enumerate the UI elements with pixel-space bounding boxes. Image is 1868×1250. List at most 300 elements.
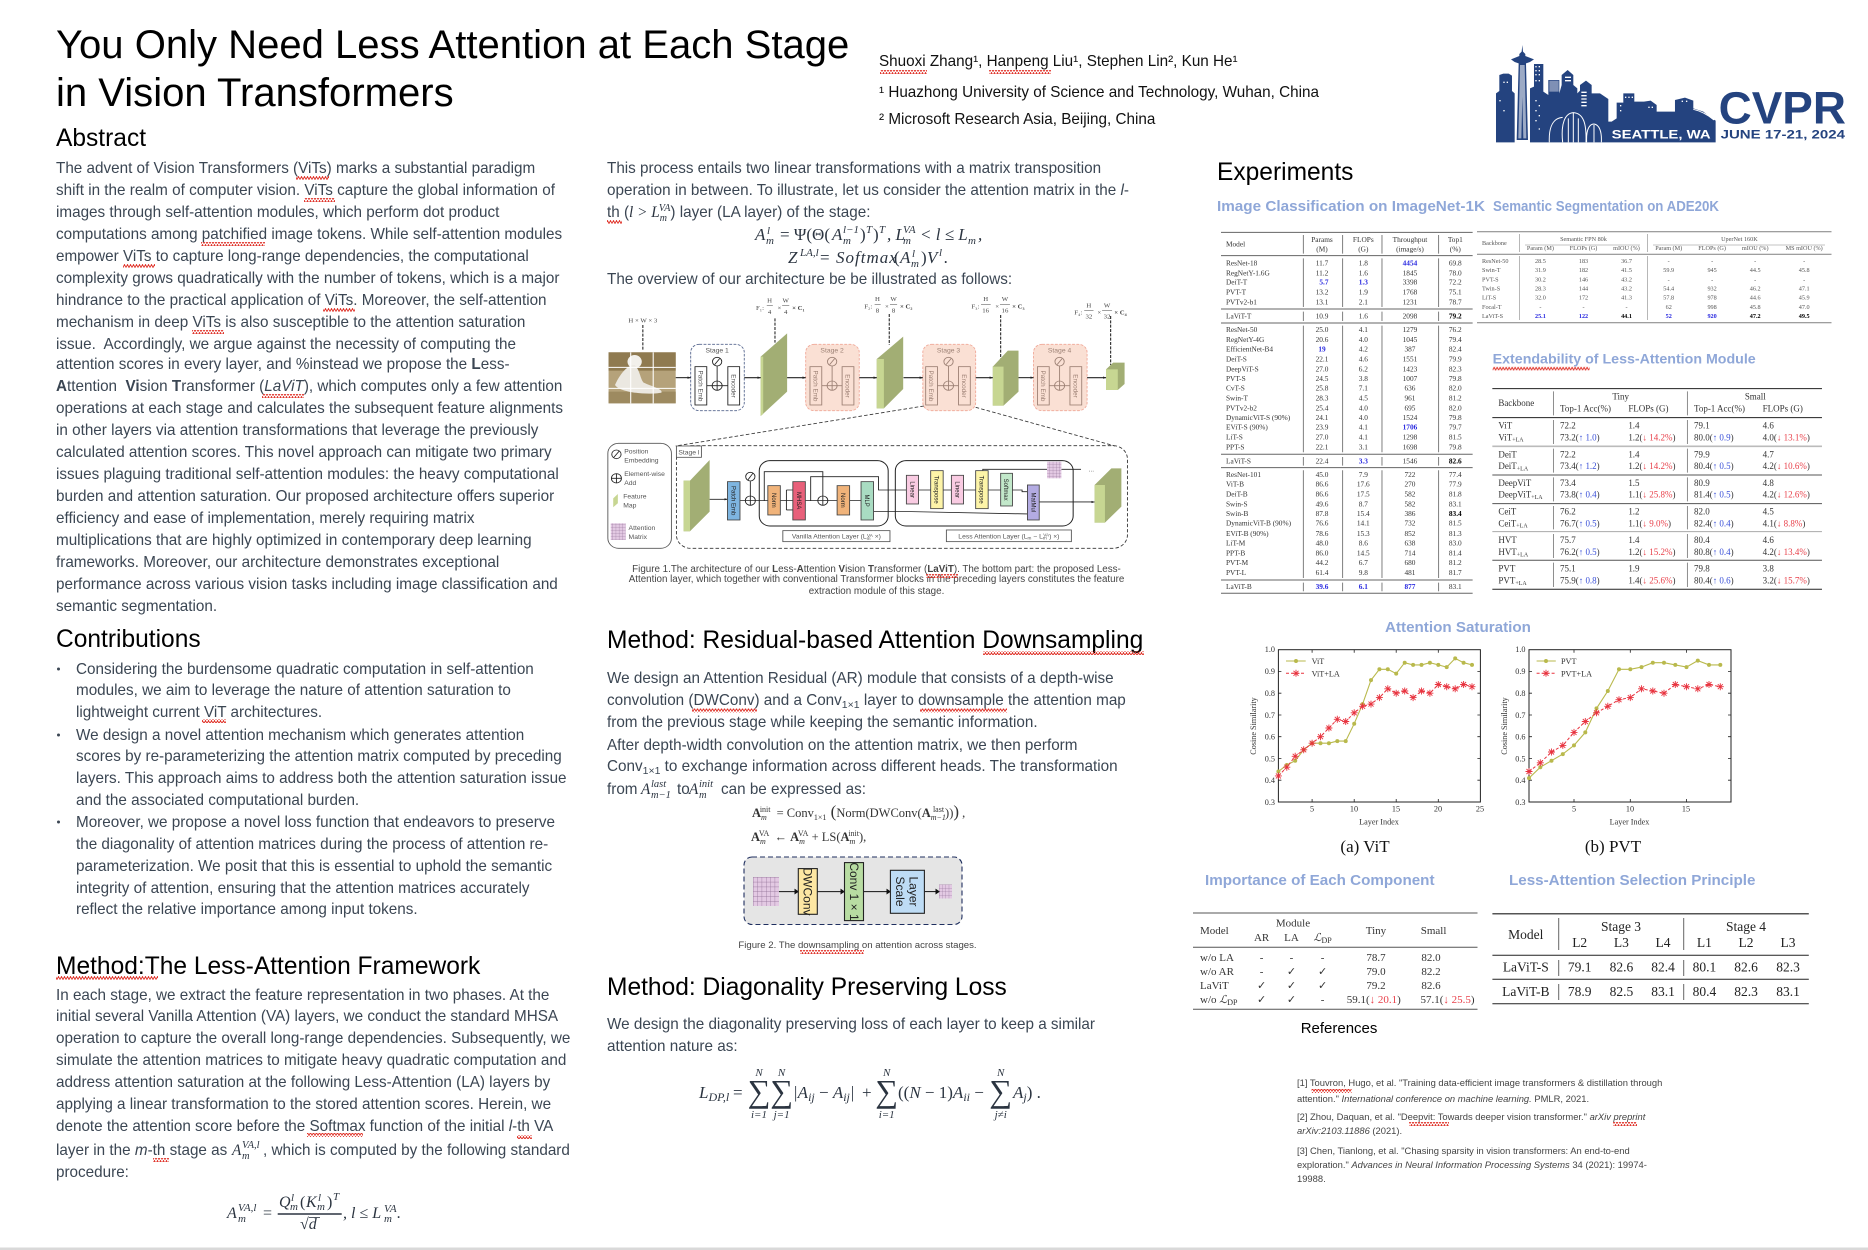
section: contributions: Contributions — [56, 626, 201, 653]
section: method, residual-based attention downsampling: from the previous stage while keeping the semantic information. — [607, 714, 1038, 731]
section: method, the less-attention framework: initial several Vanilla Attention (VA) layers, we conduct the standard MHSA — [56, 1008, 559, 1025]
table: ade20k segmentation: - — [1754, 276, 1756, 283]
vanilla attention and less attention layers: Linear — [953, 481, 960, 498]
table: ade20k segmentation: 998 — [1707, 304, 1717, 311]
formula: diagonality preserving loss: N — [777, 1067, 786, 1079]
table: ade20k segmentation: LaViT-S — [1482, 313, 1504, 320]
formula: attention residual: 1×1 — [814, 813, 826, 822]
table: ade20k segmentation: 41.5 — [1621, 267, 1632, 274]
table: extendability: 80.9 — [1694, 478, 1710, 488]
table: imagenet classification: ResNet-50 — [1226, 325, 1258, 334]
top labels: H — [983, 296, 988, 303]
top labels: W — [782, 298, 790, 305]
chart captions: (a) ViT — [1340, 837, 1390, 856]
table: ade20k segmentation: 57.8 — [1663, 295, 1674, 302]
formula: attention residual: init — [848, 829, 860, 838]
table: imagenet classification: 61.4 — [1316, 568, 1329, 577]
formula: attention residual: A — [840, 830, 850, 844]
section: abstract: calculated attention scores. This novel approach can mitigate two primary — [56, 444, 552, 461]
table: imagenet classification: 77.9 — [1449, 480, 1462, 489]
table: ade20k segmentation: - — [1539, 304, 1541, 311]
table: ade20k segmentation: 54.4 — [1663, 286, 1674, 293]
table: imagenet classification: 79.4 — [1449, 335, 1462, 344]
section: abstract: empower ViTs to capture long-range dependencies, the computational — [56, 248, 529, 265]
table: imagenet classification: 8.7 — [1359, 499, 1368, 508]
formula: la attention: m — [911, 258, 919, 270]
table: extendability: DeepViT — [1498, 478, 1532, 488]
axis labels and legend: 0.6 — [1265, 732, 1275, 742]
formula: diagonality preserving loss: − — [815, 1083, 833, 1102]
top labels: H × W × 3 — [628, 318, 658, 324]
section: method, the less-attention framework: , which is computed by the following standard — [263, 1142, 570, 1159]
legend: Element-wise — [624, 471, 665, 478]
table: imagenet classification: 5.7 — [1319, 278, 1329, 287]
section: abstract: multiplications that are highly optimized in contemporary deep learning — [56, 532, 532, 549]
section: method, diagonality preserving loss: We design the diagonality preserving loss of each layer to keep a similar — [607, 1016, 1095, 1033]
section: method, the less-attention framework: A — [231, 1142, 242, 1159]
table: ade20k segmentation: 28.3 — [1535, 286, 1546, 293]
figure 1 caption — [629, 564, 1125, 597]
formula: la attention: ( — [894, 248, 900, 267]
table: ade20k segmentation: MS mIOU (%) — [1786, 245, 1823, 252]
table: extendability: 1.4 — [1628, 421, 1640, 431]
table: imagenet classification: 4.0 — [1359, 335, 1368, 344]
table: imagenet classification: 81.8 — [1449, 490, 1462, 499]
legend — [608, 443, 671, 548]
table: extendability: 1.5 — [1628, 478, 1640, 488]
section: method, residual-based attention downsampling: to exchange information across different heads. The transformation — [660, 758, 1118, 775]
top labels: H — [1086, 303, 1092, 309]
table: ade20k segmentation: 30.2 — [1535, 276, 1546, 283]
table: extendability: 79.8 — [1694, 564, 1710, 574]
section: abstract: mechanism in deep ViTs is also susceptible to the attention saturation — [56, 314, 525, 331]
table: imagenet classification: 4.5 — [1359, 393, 1368, 402]
table: imagenet classification: 79.7 — [1449, 423, 1462, 432]
figure 2: downsampling diagram — [744, 857, 962, 924]
table: imagenet classification: 19 — [1318, 345, 1326, 354]
table: imagenet classification: 7.9 — [1359, 470, 1368, 479]
formula: attention matrix: A — [226, 1205, 237, 1222]
axis labels and legend: 0.7 — [1265, 711, 1275, 720]
table: imagenet classification: 1.6 — [1359, 311, 1368, 320]
table: ade20k segmentation: 47.0 — [1799, 304, 1810, 311]
top labels: W — [1002, 296, 1009, 303]
table: extendability: PVT — [1498, 564, 1516, 574]
axis labels and legend — [1500, 645, 1690, 826]
table: extendability: Backbone — [1498, 398, 1534, 408]
table: imagenet classification: 15.4 — [1357, 509, 1370, 518]
table: ade20k segmentation: - — [1711, 258, 1713, 265]
table: ade20k segmentation: Param (M) — [1527, 245, 1554, 252]
table: imagenet classification: 17.6 — [1357, 480, 1370, 489]
table: imagenet classification: 961 — [1404, 393, 1416, 402]
table: extendability: 80.8(↑ 0.4) — [1694, 547, 1734, 557]
table: imagenet classification: 1551 — [1403, 354, 1418, 363]
formula: attention residual: = Conv — [773, 806, 815, 820]
table: extendability: 80.4 — [1694, 535, 1710, 545]
table: extendability: CeiT — [1498, 518, 1517, 528]
table: imagenet classification: EfficientNet-B4 — [1226, 345, 1273, 354]
table: imagenet classification: 39.6 — [1316, 582, 1329, 591]
formula: la attention: , L — [887, 225, 905, 244]
section: abstract: The advent of Vision Transformers (ViTs) marks a substantial paradigm — [56, 160, 535, 177]
figure 2 caption: Figure 2. The downsampling on attention across stages. — [738, 940, 977, 951]
table: imagenet classification: 4.2 — [1359, 345, 1368, 354]
table: less-attention selection principle: 83.1 — [1651, 984, 1675, 999]
table: imagenet classification: ResNet-18 — [1226, 259, 1258, 268]
section: contributions: Considering the burdensome quadratic computation in self-attention — [76, 661, 534, 678]
table: extendability: DeiT — [1498, 449, 1517, 459]
table: imagenet classification: 3.1 — [1359, 442, 1368, 451]
authors and affiliations — [879, 53, 1319, 128]
table: imagenet classification: 387 — [1404, 345, 1416, 354]
table: imagenet classification: 1698 — [1403, 442, 1418, 451]
section heading: experiments: Experiments — [1217, 159, 1353, 186]
axis labels and legend: 0.8 — [1265, 689, 1275, 698]
table: ade20k segmentation: PVT-S — [1482, 276, 1499, 283]
vanilla attention and less attention layers: MatMul — [1029, 492, 1037, 512]
table: imagenet classification: 1524 — [1403, 413, 1418, 422]
section: abstract: complexity grows quadratically with the number of tokens, which is a major — [56, 270, 559, 287]
axis labels and legend: 1.0 — [1265, 645, 1275, 654]
formula: diagonality preserving loss: + — [862, 1083, 872, 1102]
legend: Matrix — [629, 534, 648, 541]
table: imagenet classification: 13.1 — [1316, 297, 1329, 306]
table: imagenet classification: PVT-S — [1226, 374, 1246, 383]
figure 1: architecture diagram: Stage 1 — [705, 348, 729, 354]
table: extendability: +LA — [1515, 581, 1527, 587]
table: imagenet classification: 638 — [1404, 539, 1416, 548]
logo text: SEATTLE, WA — [1612, 127, 1711, 141]
table: extendability: DeepViT — [1498, 490, 1532, 500]
table: extendability: HVT — [1498, 547, 1517, 557]
table: ade20k segmentation: - — [1803, 276, 1805, 283]
formula: attention matrix: l — [291, 1192, 294, 1204]
table: less-attention selection principle: L1 — [1697, 935, 1712, 950]
formula: attention residual: A — [752, 806, 761, 820]
authors and affiliations: ² Microsoft Research Asia, Beijing, China — [879, 111, 1156, 128]
section: method, the less-attention framework — [56, 953, 570, 1181]
section: contributions: scores by re-parameterizing the attention matrix computed by preceding — [76, 748, 562, 765]
table: imagenet classification: 481 — [1404, 568, 1416, 577]
formula: attention residual: m — [850, 837, 856, 846]
table: imagenet classification: 852 — [1404, 529, 1416, 538]
stage arrows — [676, 376, 1106, 379]
table: importance of each component: 79.0 — [1366, 966, 1386, 978]
legend: Embedding — [624, 458, 659, 465]
table: importance of each component: Module — [1276, 918, 1310, 930]
table: ade20k segmentation: 41.3 — [1621, 295, 1632, 302]
table: imagenet classification: 79.9 — [1449, 354, 1462, 363]
figure 2: downsampling diagram: Layer — [906, 876, 920, 907]
table: imagenet classification: 4.1 — [1359, 433, 1368, 442]
formula: attention residual: ), — [859, 830, 866, 844]
logo text: CVPR — [1719, 82, 1846, 133]
formula: diagonality preserving loss: N — [754, 1067, 763, 1079]
figure 1: architecture diagram: Stage 2 — [820, 348, 844, 354]
references: exploration." Advances in Neural Information Processing Systems 34 (2021): 19974- — [1297, 1159, 1647, 1170]
table: imagenet classification: DynamicViT-S (90%) — [1226, 413, 1291, 422]
axis labels and legend: 10 — [1350, 804, 1358, 814]
section: abstract: issues plaguing traditional self-attention modules: the heavy computational — [56, 466, 559, 483]
table: imagenet classification: LiT-M — [1226, 539, 1246, 548]
top labels: × — [995, 304, 999, 310]
vanilla attention and less attention layers: Norm — [770, 493, 777, 508]
table: ade20k segmentation: FLOPs (G) — [1570, 245, 1597, 252]
table: extendability: 3.8 — [1763, 564, 1774, 574]
legend: Position — [624, 448, 649, 455]
legend: Add — [624, 480, 637, 487]
table: importance of each component: LA — [1284, 932, 1299, 944]
table: imagenet classification: 636 — [1404, 384, 1416, 393]
section: method, the less-attention framework: operation to capture the overall long-range dependencies. Subsequently, we — [56, 1030, 570, 1047]
table: imagenet classification: 72.2 — [1449, 278, 1462, 287]
table: imagenet classification: 81.5 — [1449, 519, 1462, 528]
section: method, residual-based attention downsampling: last — [651, 779, 667, 790]
table: imagenet classification: 1546 — [1403, 456, 1418, 465]
formula: attention matrix: VA — [384, 1203, 397, 1215]
axis labels and legend: 5 — [1310, 804, 1314, 814]
table: ade20k segmentation: mIOU (%) — [1742, 245, 1769, 252]
table: ade20k segmentation: 122 — [1579, 313, 1588, 320]
table: extendability: 4.6 — [1763, 421, 1774, 431]
top labels: × — [777, 305, 782, 312]
table: less-attention selection principle: 80.1 — [1693, 960, 1716, 974]
formula: diagonality preserving loss: A — [1013, 1083, 1023, 1102]
pvt+la series — [1529, 684, 1720, 772]
top labels: × — [1097, 310, 1102, 317]
formula: diagonality preserving loss: L — [699, 1083, 708, 1102]
table: imagenet classification: PVT-L — [1226, 568, 1247, 577]
table: imagenet classification: 2098 — [1403, 311, 1418, 320]
formula: la attention: l — [912, 248, 915, 260]
table: extendability: 4.1(↓ 8.8%) — [1763, 518, 1805, 528]
table: ade20k segmentation: 47.1 — [1799, 286, 1810, 293]
table: imagenet classification: 22.4 — [1316, 456, 1329, 465]
table: importance of each component: 82.6 — [1421, 980, 1441, 992]
table: less-attention selection principle: 80.4 — [1693, 984, 1716, 999]
formula: diagonality preserving loss: ((N − 1)A — [898, 1083, 963, 1102]
table: imagenet classification: 82.0 — [1449, 384, 1462, 393]
top labels: F₁: — [756, 305, 764, 312]
table: extendability: 4.2(↓ 12.6%) — [1763, 490, 1810, 500]
formula: attention matrix: m — [317, 1201, 325, 1213]
table: importance of each component: ✓ — [1287, 980, 1296, 992]
table: less-attention selection principle: 78.9 — [1568, 984, 1592, 999]
table: ade20k segmentation: 45.8 — [1750, 304, 1761, 311]
table: extendability: 1.2 — [1628, 506, 1640, 516]
table: imagenet classification: CvT-S — [1226, 384, 1245, 393]
formula: attention residual: + LS( — [808, 830, 840, 844]
table: imagenet classification: Swin-B — [1226, 509, 1249, 518]
formula: attention residual: last — [933, 805, 945, 814]
references: 19988. — [1297, 1173, 1326, 1184]
table: extendability: CeiT — [1498, 506, 1517, 516]
axis labels and legend: 0.3 — [1515, 798, 1526, 807]
section: abstract: efficiency and ease of implementation, merely requiring matrix — [56, 510, 475, 527]
table: imagenet classification: 86.6 — [1316, 480, 1329, 489]
stage 3 contents: Patch Emb — [927, 371, 934, 402]
table: extendability: +LA — [1517, 466, 1529, 472]
table: ade20k segmentation: Semantic FPN 80k — [1560, 236, 1608, 243]
table: imagenet classification: RegNetY-4G — [1226, 335, 1265, 344]
chart captions: (b) PVT — [1585, 837, 1642, 856]
formula: la attention: ) — [921, 248, 927, 267]
formula: attention residual: VA — [759, 829, 770, 838]
formula: attention residual: VA — [798, 829, 809, 838]
subheading: semantic segmentation: Semantic Segmentation on ADE20K — [1493, 198, 1719, 215]
top labels: × — [885, 304, 889, 310]
layer labels: Vanilla Attention Layer (L — [792, 534, 867, 541]
table: ade20k segmentation: 144 — [1579, 286, 1588, 293]
table: ade20k segmentation: - — [1625, 304, 1628, 311]
axis labels and legend: PVT+LA — [1561, 669, 1592, 678]
formula: la attention: = Ψ(Θ( — [780, 225, 830, 244]
text: la layer transformation — [607, 160, 1129, 288]
vanilla attention and less attention layers — [684, 460, 1121, 531]
formula: diagonality preserving loss: | — [850, 1083, 855, 1102]
table: less-attention selection principle: L3 — [1780, 935, 1796, 950]
table: ade20k segmentation: 36.7 — [1621, 258, 1632, 265]
table: imagenet classification: 22.1 — [1316, 354, 1329, 363]
formula: diagonality preserving loss: ∑ — [748, 1073, 770, 1109]
table: imagenet classification: 1279 — [1403, 325, 1418, 334]
top labels: W — [1104, 303, 1111, 309]
table: imagenet classification: (%) — [1450, 245, 1461, 254]
table: imagenet classification: 48.0 — [1316, 539, 1329, 548]
table: extendability: +LA — [1517, 552, 1529, 558]
legend: Attention — [629, 525, 656, 532]
table: ade20k segmentation: - — [1754, 258, 1756, 265]
table: extendability: 73.4 — [1560, 478, 1576, 488]
section: method, the less-attention framework: m — [242, 1151, 250, 1162]
table: less-attention selection principle: 82.5 — [1610, 984, 1633, 999]
top labels: W — [890, 296, 898, 303]
table: imagenet classification: 877 — [1404, 582, 1416, 591]
table: imagenet classification: 4.1 — [1359, 423, 1368, 432]
figure 1: architecture diagram: Stage 4 — [1048, 348, 1072, 354]
section: method, residual-based attention downsampling — [607, 627, 1144, 801]
table: extendability: 1.4 — [1628, 535, 1640, 545]
table: importance of each component: w/o ℒ — [1200, 994, 1227, 1006]
section: abstract: images through self-attention modules, which perform dot product — [56, 204, 500, 221]
formula: diagonality preserving loss: DP,l — [707, 1090, 730, 1104]
table: less-attention selection principle: Model — [1508, 927, 1544, 942]
table: imagenet classification: PVT-T — [1226, 287, 1247, 296]
table: extendability: 1.1(↓ 9.0%) — [1628, 518, 1671, 528]
table: importance of each component: ℒ — [1314, 932, 1321, 944]
table: extendability: PVT — [1498, 576, 1516, 586]
text: la layer transformation: VA — [659, 203, 671, 214]
formula: attention matrix: √d — [300, 1216, 318, 1233]
table: extendability: Tiny — [1612, 392, 1629, 402]
layer labels — [783, 530, 1071, 542]
table: ade20k segmentation: 43.2 — [1621, 276, 1632, 283]
section: method, the less-attention framework: address attention saturation at the following Less-Attention (LA) layers by — [56, 1074, 551, 1091]
figure 2: downsampling diagram: DWConv — [800, 867, 814, 916]
formula: attention residual: ( — [826, 802, 837, 821]
axis labels and legend: ViT — [1312, 657, 1324, 666]
table: imagenet classification: 3398 — [1403, 278, 1418, 287]
formula: la attention: = — [820, 248, 830, 267]
table: extendability: 3.2(↓ 15.7%) — [1763, 576, 1810, 586]
table: extendability: 75.1 — [1560, 564, 1576, 574]
table: importance of each component: LaViT — [1200, 980, 1229, 992]
table: less-attention selection principle: Stage 3 — [1601, 919, 1641, 934]
formula: la attention: m — [903, 235, 911, 247]
table: imagenet classification: 24.5 — [1316, 374, 1329, 383]
table: imagenet classification: 582 — [1404, 499, 1416, 508]
dashed feature connectors — [643, 314, 1111, 365]
formula: la attention: l — [939, 247, 942, 259]
table: imagenet classification: 28.3 — [1316, 393, 1329, 402]
table: extendability: ViT — [1498, 432, 1513, 442]
title: You Only Need Less Attention at Each Stage — [56, 23, 849, 67]
vanilla attention and less attention layers: Transpose — [933, 476, 940, 504]
section: method, diagonality preserving loss — [607, 974, 1095, 1055]
formula: diagonality preserving loss: A — [833, 1083, 843, 1102]
table: imagenet classification: 79.8 — [1449, 413, 1462, 422]
table: imagenet classification: 4.6 — [1359, 354, 1368, 363]
formula: la attention: l — [767, 225, 770, 237]
table: imagenet classification: DeiT-S — [1226, 354, 1247, 363]
figure 1: architecture diagram — [608, 296, 1127, 548]
table: imagenet classification: 1298 — [1403, 433, 1418, 442]
table: extendability: 80.4(↑ 0.6) — [1694, 576, 1734, 586]
table: imagenet classification: 82.0 — [1449, 403, 1462, 412]
formula: la attention: , — [978, 225, 982, 244]
axis labels and legend: Cosine Similarity — [1249, 696, 1258, 755]
table: imagenet classification: 1.9 — [1359, 287, 1368, 296]
table: imagenet classification: (image/s) — [1396, 245, 1424, 254]
table: imagenet classification: 10.9 — [1316, 311, 1329, 320]
axis labels and legend: 10 — [1626, 804, 1634, 814]
axis labels and legend: 20 — [1434, 804, 1442, 814]
table: imagenet classification: 1231 — [1403, 297, 1418, 306]
table: importance of each component: ✓ — [1257, 980, 1266, 992]
section: contributions: integrity of attention, ensuring that the attention matrices accurately — [76, 880, 530, 897]
axis labels and legend: 1.0 — [1515, 645, 1526, 654]
section: method, diagonality preserving loss: Method: Diagonality Preserving Loss — [607, 974, 1007, 1001]
table: imagenet classification: PVT-M — [1226, 558, 1249, 567]
table: imagenet classification: 4.1 — [1359, 325, 1368, 334]
legend: Map — [623, 502, 637, 509]
table: imagenet classification: 78.0 — [1449, 268, 1462, 277]
table: importance of each component: ✓ — [1287, 966, 1296, 978]
top labels: 4 — [784, 309, 788, 316]
table: importance of each component: w/o LA — [1200, 952, 1234, 964]
table: extendability: 4.5 — [1763, 506, 1774, 516]
table: extendability: 80.4(↑ 0.5) — [1694, 461, 1734, 471]
table: ade20k segmentation: 59.9 — [1663, 267, 1674, 274]
table: imagenet classification: 7.1 — [1359, 384, 1368, 393]
references: [3] Chen, Tianlong, et al. "Chasing sparsity in vision transformers: An end-to-end — [1297, 1145, 1630, 1156]
table: imagenet classification: 76.2 — [1449, 325, 1462, 334]
table: extendability: 1.4 — [1628, 449, 1640, 459]
section: abstract: semantic segmentation. — [56, 598, 217, 615]
table: imagenet classification: 25.8 — [1316, 384, 1329, 393]
table: extendability: 1.4(↓ 25.6%) — [1628, 576, 1676, 586]
table: ade20k segmentation: 183 — [1579, 258, 1588, 265]
table: importance of each component: 82.0 — [1421, 952, 1441, 964]
table: imagenet classification: 81.4 — [1449, 548, 1462, 557]
table: ade20k segmentation: - — [1803, 258, 1805, 265]
table: imagenet classification: 15.3 — [1357, 529, 1370, 538]
references: [1] Touvron, Hugo, et al. "Training data-efficient image transformers & distillation through — [1297, 1077, 1662, 1088]
axis labels and legend: 0.9 — [1265, 667, 1275, 676]
table: importance of each component: 59.1(↓ 20.1) — [1347, 994, 1401, 1006]
table: imagenet classification: 1768 — [1403, 287, 1418, 296]
